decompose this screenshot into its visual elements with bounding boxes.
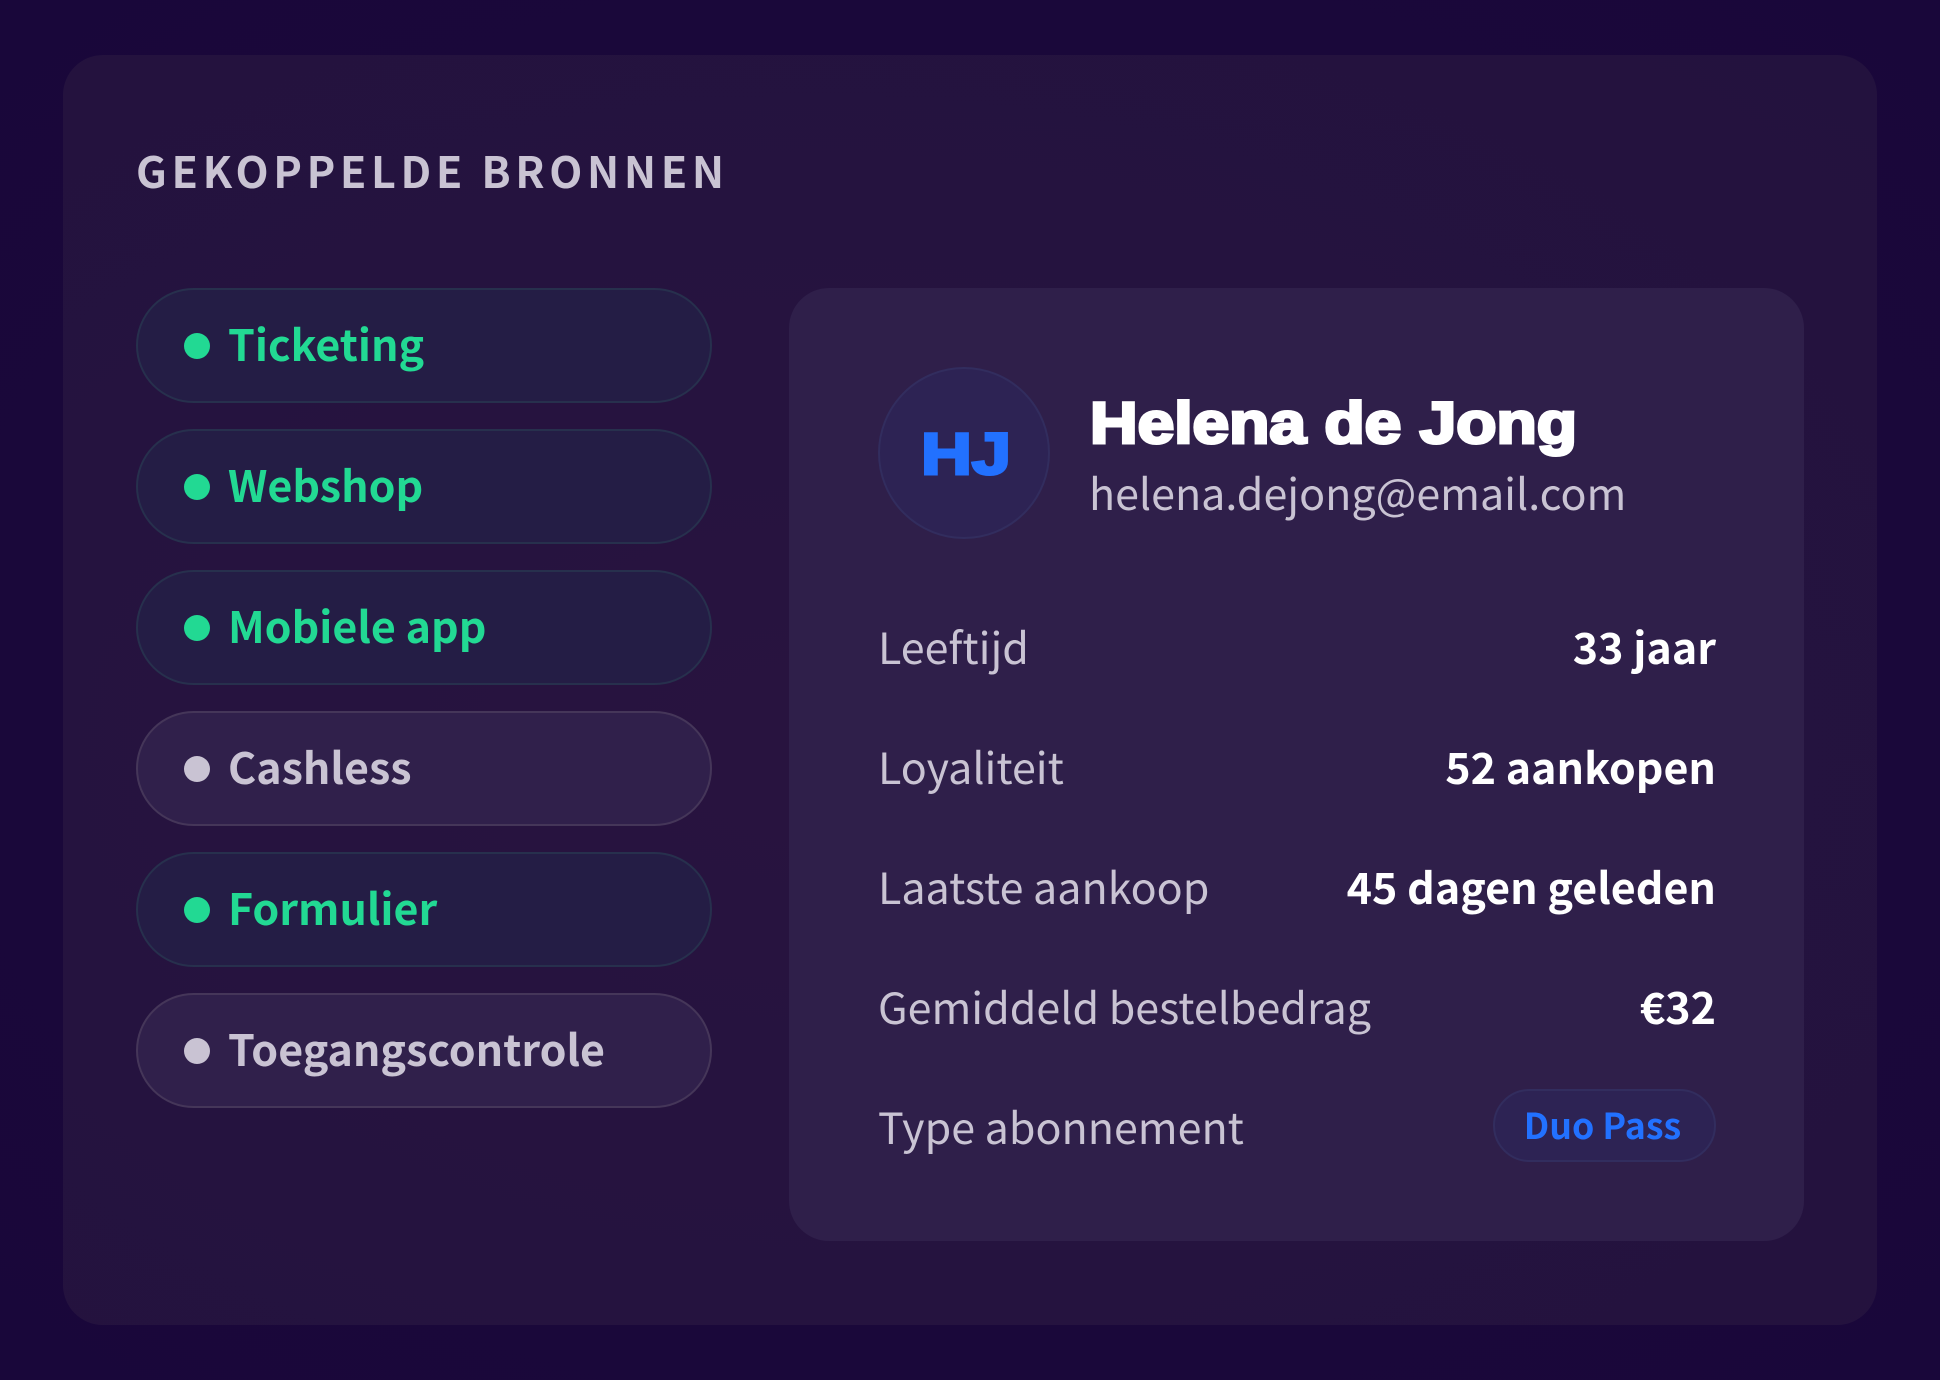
source chip: Cashless <box>136 711 712 826</box>
source chip: Mobiele app: Mobiele app <box>228 594 486 656</box>
row: Leeftijd <box>878 615 1716 677</box>
row: Laatste aankoop: Laatste aankoop <box>878 855 1209 917</box>
row: Gemiddeld bestelbedrag <box>878 975 1716 1037</box>
source chip: Formulier: Formulier <box>228 876 437 938</box>
source chip: Toegangscontrole: Toegangscontrole <box>228 1017 605 1079</box>
row: Type abonnement: Type abonnement <box>878 1095 1244 1157</box>
row: Loyaliteit: 52 aankopen <box>1445 735 1716 797</box>
avatar <box>878 367 1050 539</box>
row: Laatste aankoop <box>878 855 1716 917</box>
source chip: Cashless: Cashless <box>228 735 412 797</box>
row: Gemiddeld bestelbedrag: €32 <box>1640 975 1716 1037</box>
source chip: Ticketing: Ticketing <box>228 312 424 374</box>
customer name: Helena de Jong <box>1090 391 1577 456</box>
source chip: Formulier <box>136 852 712 967</box>
row: Laatste aankoop: 45 dagen geleden <box>1347 855 1716 917</box>
badge: Duo Pass: Duo Pass <box>1524 1099 1681 1150</box>
source chip: Webshop: Webshop <box>228 453 423 515</box>
row: Gemiddeld bestelbedrag: Gemiddeld bestelbedrag <box>878 975 1371 1037</box>
panel: profile card <box>789 288 1804 1241</box>
row: Loyaliteit <box>878 735 1716 797</box>
avatar: HJ <box>921 422 1011 487</box>
row: Leeftijd: 33 jaar <box>1573 615 1716 677</box>
row: Leeftijd: Leeftijd <box>878 615 1029 677</box>
source chip: Mobiele app <box>136 570 712 685</box>
source chip: Toegangscontrole <box>136 993 712 1108</box>
title: GEKOPPELDE BRONNEN <box>136 139 729 201</box>
row: Loyaliteit: Loyaliteit <box>878 735 1064 797</box>
source chip: Webshop <box>136 429 712 544</box>
customer email: helena.dejong@email.com <box>1089 461 1626 523</box>
badge: Duo Pass <box>1493 1089 1716 1162</box>
source chip: Ticketing <box>136 288 712 403</box>
